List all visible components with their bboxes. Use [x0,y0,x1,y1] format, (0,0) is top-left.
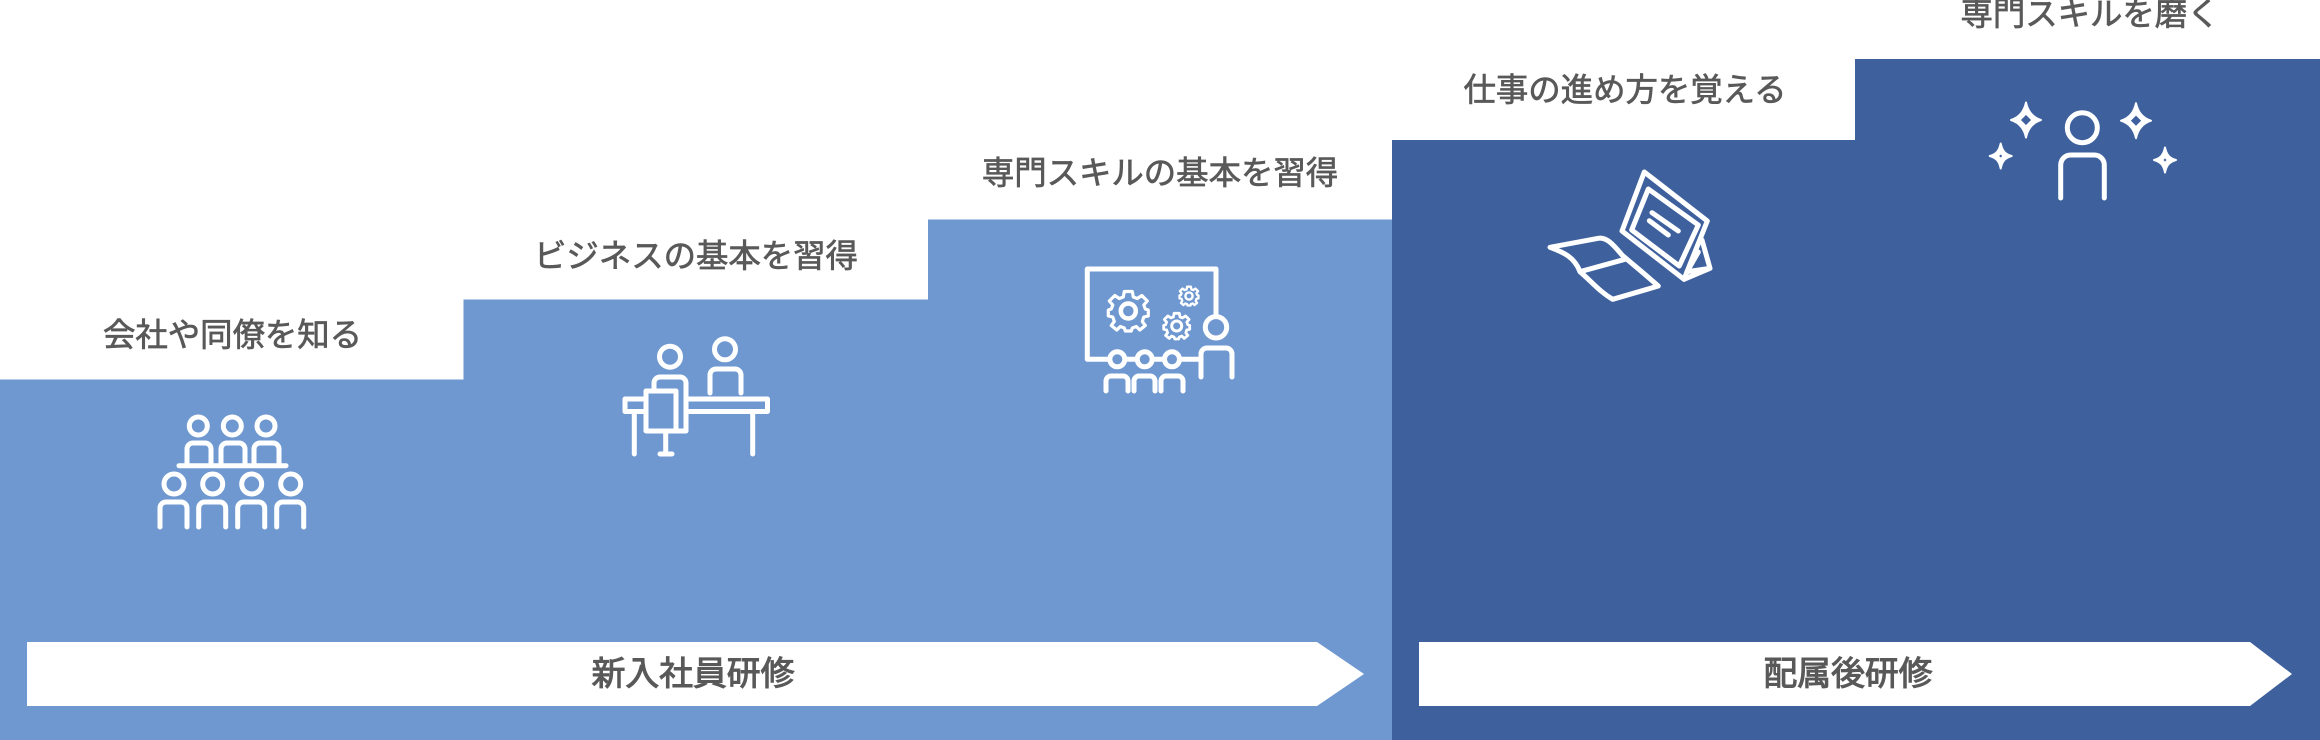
gear: small [1180,287,1198,306]
heading: step 3: 専門スキルの基本を習得 [982,155,1338,191]
icon: group of people [160,417,304,527]
icon: person with sparkles [1990,102,2176,198]
heading: step 4: 仕事の進め方を覚える [1464,72,1786,108]
heading: step 1: 会社や同僚を知る [103,317,362,353]
icon: presenter with gears board [1087,269,1232,391]
arrow label: 新入社員研修 [592,655,795,693]
panel: post-assignment training steps [1392,59,2320,740]
icon: tablet and open book [1550,172,1710,299]
sparkles [1990,102,2176,172]
arrow: new-employee training [27,642,1364,706]
gear: large [1108,292,1148,331]
icon: people at desk [625,339,768,454]
gear: medium [1164,313,1190,339]
arrow: post-assignment training [1419,642,2292,706]
heading: step 2: ビジネスの基本を習得 [534,238,858,274]
arrow label: 配属後研修 [1764,655,1933,693]
panel: new-employee training steps [0,220,1392,740]
